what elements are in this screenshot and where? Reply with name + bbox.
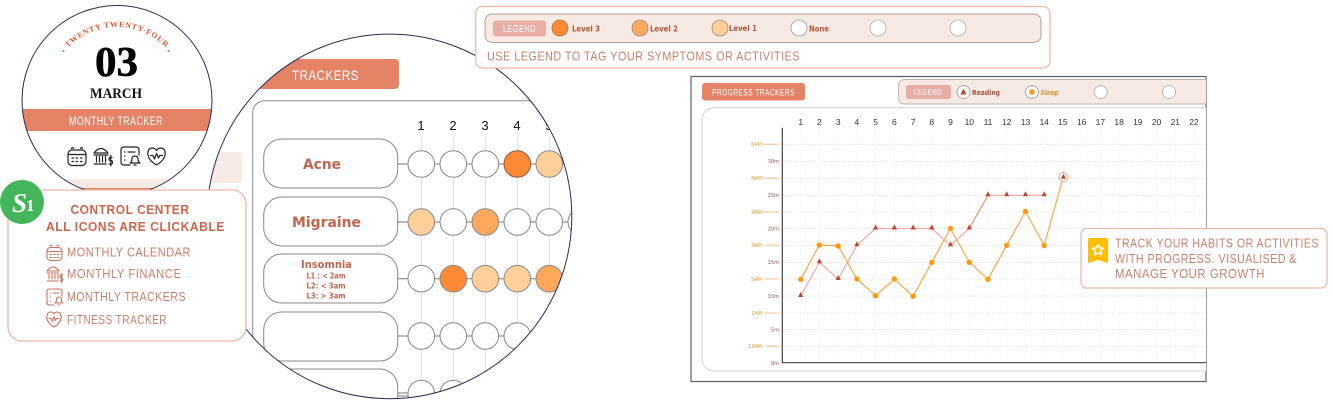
progress trackers heading (702, 83, 805, 100)
progress trackers heading: PROGRESS TRACKERS (712, 88, 795, 98)
x axis day labels: 9 (948, 117, 953, 127)
trackers heading (258, 59, 399, 89)
row: Insomnia: L1 : < 2am (306, 272, 346, 280)
y axis sleep labels: 6AM (751, 142, 762, 148)
day numbers: 4 (513, 118, 521, 133)
row: Migraine (264, 197, 595, 246)
row: Migraine: Migraine (292, 215, 361, 231)
x axis day labels: 20 (1152, 117, 1162, 127)
legend item: none (791, 20, 829, 36)
legend item: reading: Reading (972, 89, 1000, 97)
x axis day labels: 19 (1133, 117, 1143, 127)
x axis day labels: 22 (1189, 117, 1199, 127)
x axis day labels: 11 (984, 117, 993, 127)
legend bar: LEGEND (503, 24, 536, 35)
list: control center items (67, 246, 191, 327)
y axis sleep labels (748, 142, 779, 350)
legend item: level 1 (712, 20, 757, 36)
trackers heading: TRACKERS (292, 67, 359, 83)
x axis day labels: 1 (798, 117, 803, 127)
line chart (748, 117, 1206, 367)
callout text: MANAGE YOUR GROWTH (1115, 267, 1265, 281)
x axis day labels: 12 (1002, 117, 1012, 127)
chart frame (702, 108, 1262, 371)
day numbers: 3 (481, 118, 489, 133)
x axis day labels: 10 (965, 117, 974, 127)
chart legend: LEGEND (914, 87, 942, 97)
x axis day labels: 4 (855, 117, 860, 127)
callout text: WITH PROGRESS. VISUALISED & (1115, 252, 1297, 266)
row: Acne: Acne (303, 157, 341, 173)
x axis day labels: 14 (1039, 117, 1049, 127)
sleep series (798, 178, 1063, 299)
day numbers: 5 (545, 118, 553, 133)
x axis day labels: 7 (911, 117, 916, 127)
day numbers: 1 (417, 118, 425, 133)
heading: control center (46, 202, 225, 234)
y axis sleep labels: 1AM (751, 311, 762, 317)
panel: symptom legend callout (476, 6, 1050, 68)
icon: tracker small (47, 289, 63, 305)
legend item: reading (957, 86, 1000, 98)
list: control center items: MONTHLY CALENDAR (67, 246, 191, 260)
y axis reading labels: 20m (768, 226, 779, 232)
x axis day labels: 2 (817, 117, 822, 127)
legend item: sleep: Sleep (1040, 89, 1058, 97)
callout: control center (8, 190, 246, 341)
x axis day labels (799, 119, 1198, 125)
y axis reading labels: 5m (771, 328, 779, 334)
y axis sleep labels: 9AM (751, 210, 762, 216)
x axis day labels: 17 (1096, 117, 1105, 127)
row: Insomnia (264, 254, 563, 303)
reading series (798, 191, 1047, 297)
list: control center items: MONTHLY TRACKERS (67, 290, 186, 304)
list: control center items: FITNESS TRACKER (67, 313, 167, 327)
y axis reading labels: 15m (768, 260, 779, 266)
beige strip behind callout (210, 152, 242, 183)
list: control center items: MONTHLY FINANCE (67, 267, 182, 281)
month number: 03 (95, 40, 138, 86)
badge: S1 section marker: S (12, 188, 27, 218)
marker: day 15 overlap (1059, 172, 1068, 182)
legend item: level 3: Level 3 (572, 24, 600, 34)
icon: heart small (47, 312, 61, 327)
x axis day labels: 3 (836, 117, 841, 127)
icon: finance (94, 148, 112, 166)
panel: progress trackers (691, 76, 1262, 382)
header band: MONTHLY TRACKER (69, 116, 163, 128)
icon: star bookmark (1088, 238, 1108, 263)
badge: S1 section marker: 1 (26, 196, 34, 215)
y axis reading labels: 30m (768, 159, 779, 165)
day numbers: 2 (449, 118, 457, 133)
callout text (1115, 236, 1319, 281)
trackers table frame (252, 100, 530, 337)
legend item: sleep (1026, 86, 1058, 98)
y axis sleep labels: 5AM (751, 243, 762, 249)
x axis day labels: 16 (1077, 117, 1087, 127)
x axis day labels: 6 (892, 117, 897, 127)
legend item: level 1: Level 1 (729, 24, 757, 33)
badge: S1 section marker (0, 180, 44, 224)
x axis day labels: 13 (1021, 117, 1030, 127)
y axis reading labels (768, 159, 779, 367)
legend bar (485, 14, 1041, 42)
row: Insomnia: Insomnia (301, 259, 352, 271)
day numbers (418, 121, 550, 130)
header band (20, 109, 215, 131)
icon: calendar small (47, 245, 62, 260)
month name: MARCH (90, 86, 142, 102)
panel: month badge circle (22, 5, 212, 190)
row: empty five (288, 368, 462, 398)
icon: calendar (68, 148, 86, 166)
icon: fitness heart (148, 148, 165, 165)
legend item: level 2: Level 2 (650, 24, 678, 34)
y axis reading labels: 0m (771, 361, 779, 367)
heading: control center: ALL ICONS ARE CLICKABLE (46, 219, 225, 234)
curved year text: TWENTY TWENTY-FOUR (64, 22, 168, 48)
row: empty four (264, 312, 531, 361)
heading: control center: CONTROL CENTER (70, 202, 190, 217)
legend caption: USE LEGEND TO TAG YOUR SYMPTOMS OR ACTIVITIES (487, 48, 800, 64)
legend item: level 2 (632, 20, 678, 36)
x axis day labels: 18 (1114, 117, 1124, 127)
y axis sleep labels: 5AM (751, 277, 762, 283)
x axis day labels: 21 (1171, 117, 1180, 127)
row: Insomnia: L2: < 3am (306, 282, 346, 290)
icon: tracker note (121, 147, 140, 165)
row: Acne (264, 139, 563, 188)
y axis reading labels: 10m (768, 294, 779, 300)
y axis sleep labels: 8AM (751, 176, 762, 182)
x axis day labels: 5 (873, 117, 878, 127)
chart legend (898, 80, 1238, 104)
panel: magnified trackers circle (190, 34, 595, 400)
y axis sleep labels: 12AM (748, 344, 762, 350)
icon: finance small (47, 267, 63, 282)
legend item: none: None (809, 24, 829, 34)
axes (782, 128, 1206, 363)
row: Insomnia: L3: > 3am (306, 292, 346, 300)
x axis day labels: 15 (1058, 117, 1068, 127)
callout: track your habits (1081, 228, 1327, 288)
x axis day labels: 8 (929, 117, 934, 127)
y axis reading labels: 25m (768, 193, 779, 199)
legend item: level 3 (552, 20, 600, 36)
